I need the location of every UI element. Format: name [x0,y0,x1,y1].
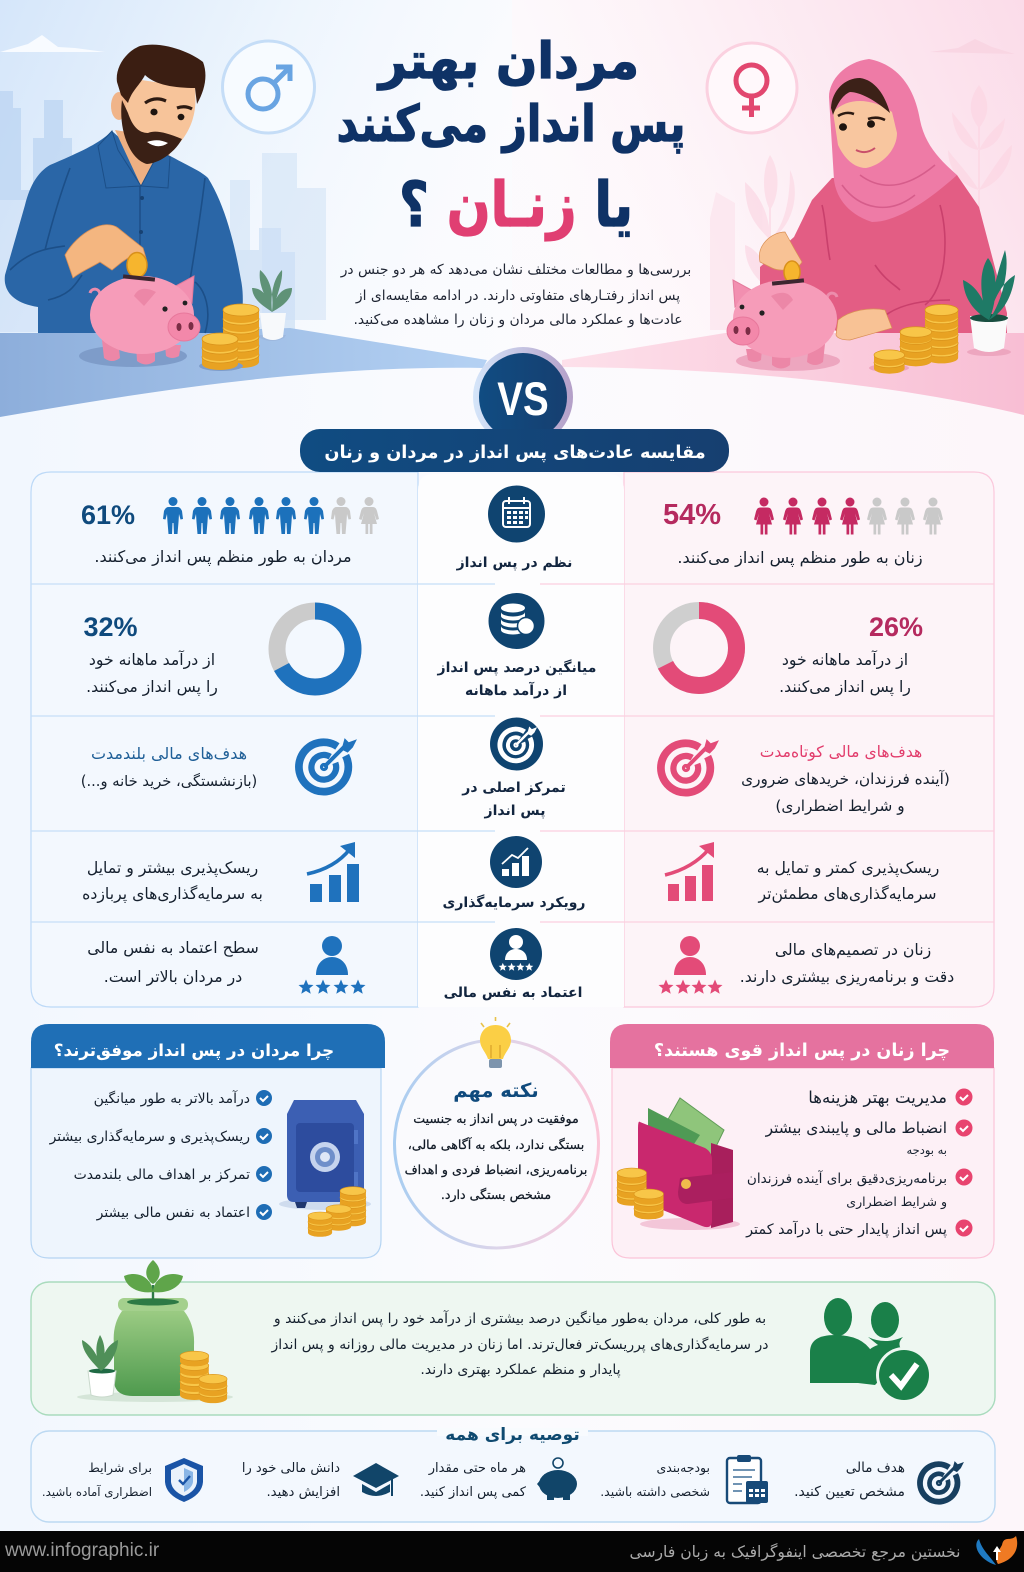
list: men reasons: ریسک‌پذیری و سرمایه‌گذاری بیشتر [49,1128,250,1145]
panel: why men succeed [31,1024,385,1258]
row 5: confidence, men [87,936,366,994]
list: women reasons: و شرایط اضطراری [846,1194,947,1210]
list: men reasons: اعتماد به نفس مالی بیشتر [96,1205,250,1221]
table wedge: men side [0,328,487,417]
advice: monthly saving: کمی پس انداز کنید. [420,1485,527,1500]
footer: www.infographic.ir [4,1540,160,1561]
panel: advice for everyone [31,1425,995,1522]
conclusion text: در سرمایه‌گذاری‌های پرریسک‌تر فعال‌ترند. اما زنان در مدیریت مالی روزانه و پس انداز [271,1336,768,1353]
row 2: average percent, men: را پس انداز می‌کنند. [86,677,218,697]
row 5: criterion [444,928,582,1001]
row 4: risk, men: ریسک‌پذیری بیشتر و تمایل [87,858,258,878]
row 1: criterion [456,486,572,571]
row 3: criterion: تمرکز اصلی در [461,780,566,796]
illustration: woman saving coin [727,59,1015,374]
intro paragraph [340,262,691,328]
advice: monthly saving: هر ماه حتی مقدار [428,1461,526,1476]
row 2: criterion [437,593,596,699]
row 4: criterion [442,836,586,911]
row 2: average percent, women [662,610,923,697]
row 1: regular saving, women: زنان به طور منظم پس انداز می‌کنند. [677,548,923,568]
footer: نخستین مرجع تخصصی اینفوگرافیک به زبان فارسی [629,1543,961,1562]
row 5: confidence, women: دقت و برنامه‌ریزی بیشتری دارند. [740,967,954,987]
row 1: criterion: نظم در پس انداز [456,555,572,571]
advice title: توصیه برای همه [445,1425,580,1445]
callout: key point: نکته مهم [453,1079,539,1102]
advice: budgeting: بودجه‌بندی [656,1460,710,1476]
row 2: average percent, women: را پس انداز می‌کنند. [779,677,911,697]
row 3: goals, women: هدف‌های مالی کوتاه‌مدت [760,743,922,762]
row 1: regular saving, men: 61% [81,500,135,530]
row 3: goals, women [661,739,950,815]
row 2: average percent, women: از درآمد ماهانه خود [782,650,908,670]
advice: emergency readiness: اضطراری آماده باشید. [42,1484,152,1500]
callout: key point: مشخص بستگی دارد. [441,1187,551,1203]
intro paragraph: پس انداز رفتـارهای متفاوتی دارند. در ادامه مقایسه‌ای از [355,288,680,304]
panel header: women [610,1024,994,1068]
icon: male symbol [222,41,314,133]
icon: site logo [976,1536,1017,1565]
callout: key point: بستگی ندارد، بلکه به آگاهی مالی، [408,1137,584,1153]
title: یا زنـان ؟ [399,169,633,241]
row 2: average percent, women: 26% [869,612,923,642]
row 1: regular saving, men [81,497,379,567]
intro paragraph: عادت‌ها و عملکرد مالی مردان و زنان را مشاهده می‌کنید. [353,312,683,328]
hero background: women side [512,0,1024,400]
row 5: confidence, women: زنان در تصمیم‌های مالی [775,940,931,960]
icon: green savings jar [77,1260,233,1403]
title [337,31,685,241]
advice: financial goal [794,1460,964,1502]
list: women reasons: پس انداز پایدار حتی با درآمد کمتر [745,1220,947,1238]
list: women reasons: برنامه‌ریزی‌دقیق برای آینده فرزندان [747,1170,947,1187]
advice: emergency readiness: برای شرایط [88,1460,152,1476]
panel: conclusion [31,1260,995,1415]
conclusion text: پایدار و منظم عملکرد بهتری دارند. [420,1362,621,1378]
icon: female symbol [707,43,797,133]
panel header: women: چرا زنان در پس انداز قوی هستند؟ [654,1041,950,1061]
row 1: regular saving, men: مردان به طور منظم پس انداز می‌کنند. [94,547,352,567]
table wedge: women side [562,333,1024,415]
advice: financial knowledge [242,1461,399,1500]
panel header: men: چرا مردان در پس انداز موفق‌ترند؟ [54,1040,334,1061]
row 2: criterion: از درآمد ماهانه [465,681,567,699]
row 3: goals, men: (بازنشستگی، خرید خانه و...) [81,772,257,790]
row 3: goals, women: و شرایط اضطراری) [775,797,905,815]
advice: budgeting [600,1455,768,1503]
icon: man and woman with check [810,1298,932,1403]
row 4: risk, women: سرمایه‌گذاری‌های مطمئن‌تر [757,884,937,904]
row 1: regular saving, women: 54% [663,499,721,531]
list: men reasons: تمرکز بر اهداف مالی بلندمدت [74,1167,250,1183]
hero background: men side [0,0,512,400]
row 4: risk, men [82,842,359,904]
callout: key point: موفقیت در پس انداز به جنسیت [413,1111,579,1127]
row 2: criterion: میانگین درصد پس انداز [437,659,596,676]
row 5: confidence, men: در مردان بالاتر است. [104,967,242,987]
advice: financial knowledge: دانش مالی خود را [242,1461,340,1476]
callout: key point [394,1017,598,1248]
row 5: confidence, men: سطح اعتماد به نفس مالی [87,938,259,958]
icon: light bulb [480,1017,511,1068]
callout: key point: برنامه‌ریزی، انضباط فردی و اهداف [405,1162,587,1178]
row 3: goals, men: هدف‌های مالی بلندمدت [91,744,247,763]
comparison table [31,472,994,1007]
row 3: criterion: پس انداز [484,803,545,819]
advice: monthly saving [420,1458,577,1500]
row 4: criterion: رویکرد سرمایه‌گذاری [442,894,586,911]
title: مردان بهتر [376,31,639,90]
conclusion text [271,1310,768,1378]
icon: wallet with cash and coins [617,1098,740,1230]
panel: why women are strong [610,1024,994,1258]
row 2: average percent, men: 32% [83,612,138,642]
row 4: risk, men: به سرمایه‌گذاری‌های پربازده [82,884,263,904]
advice: budgeting: شخصی داشته باشید. [600,1484,710,1499]
VS badge: VS [497,373,549,426]
intro paragraph: بررسی‌ها و مطالعات مختلف نشان می‌دهد که هر دو جنس در [340,262,691,278]
row 5: confidence, women [658,936,954,994]
illustration: man saving coin [5,45,292,371]
row 4: risk, women [665,842,939,904]
row 1: regular saving, women [663,498,943,568]
list: women reasons [745,1088,972,1238]
row 3: criterion [461,718,566,819]
comparison banner [300,429,729,472]
VS badge [473,347,573,447]
row 4: risk, women: ریسک‌پذیری کمتر و تمایل به [757,858,939,878]
list: men reasons [49,1090,272,1221]
row 3: goals, men [81,738,357,792]
comparison banner: مقایسه عادت‌های پس انداز در مردان و زنان [324,443,706,463]
panel header: men [31,1024,385,1068]
row 2: average percent, men [83,611,353,697]
advice: emergency readiness [42,1458,203,1502]
row 3: goals, women: (آینده فرزندان، خریدهای ضروری [741,770,950,788]
row 5: criterion: اعتماد به نفس مالی [444,985,582,1001]
list: women reasons: انضباط مالی و پایبندی بیشتر [765,1119,947,1138]
list: women reasons: مدیریت بهتر هزینه‌ها [808,1088,947,1108]
advice: financial knowledge: افزایش دهید. [266,1485,340,1500]
icon: safe with coins [279,1100,371,1237]
list: men reasons: درآمد بالاتر به طور میانگین [94,1090,250,1107]
conclusion text: به طور کلی، مردان به‌طور میانگین درصد بیشتری از درآمد خود را پس انداز می‌کنند و [273,1310,766,1327]
page fill under the hero curve [0,368,1024,425]
row 2: average percent, men: از درآمد ماهانه خود [89,650,215,670]
advice: financial goal: هدف مالی [846,1460,905,1476]
list: women reasons: به بودجه [906,1143,947,1158]
title: پس انداز می‌کنند [337,94,685,154]
advice: financial goal: مشخص تعیین کنید. [794,1484,905,1500]
table background [31,472,994,1007]
footer [0,1531,1024,1572]
